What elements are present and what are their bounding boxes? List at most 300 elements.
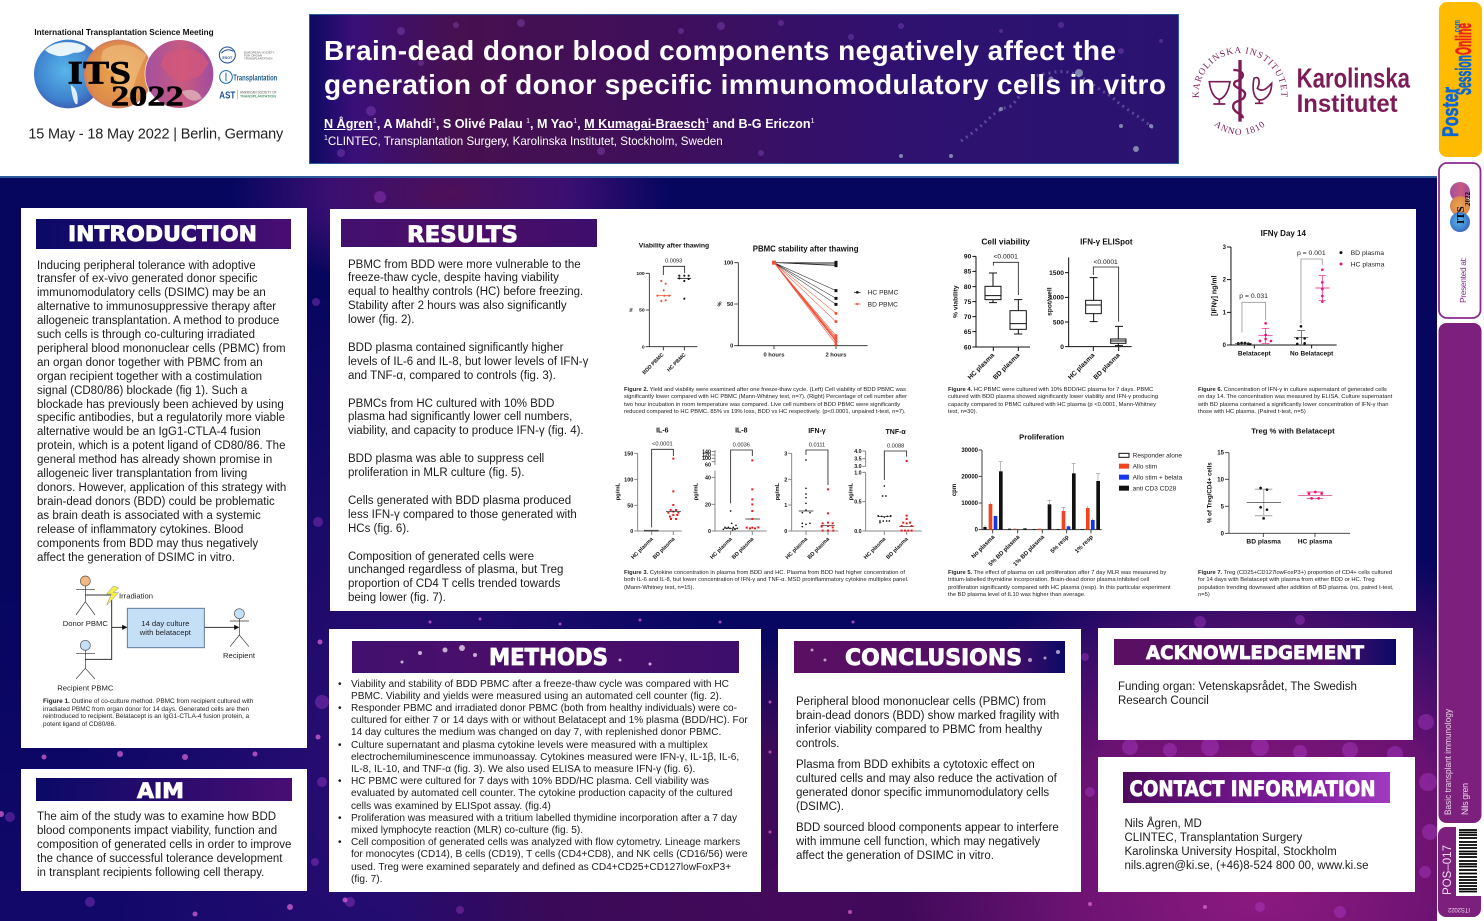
chart: Treg percent with belatacept: 15 xyxy=(1217,451,1225,457)
sidebar: presented at panel: 2022 xyxy=(1464,192,1472,206)
chart: viability after thawing: Viability after thawing xyxy=(639,242,709,249)
chart: Treg percent with belatacept: 10 xyxy=(1217,477,1225,483)
text: results body: PBMC from BDD were more vulnerable to the xyxy=(348,258,581,270)
text: results body: lower (fig. 2). xyxy=(348,314,414,326)
chart: IL-8: HC plasma xyxy=(709,536,734,561)
text: introduction body: general method has already shown promise in xyxy=(37,454,272,466)
diagram: co-culture method: with belatacept xyxy=(139,628,192,637)
chart: IL-8: 100 xyxy=(702,456,711,462)
chart: PBMC stability after thawing: PBMC stability after thawing xyxy=(753,244,859,253)
caption: figure 2: Figure 2. Yield and viability were examined after one freeze-thaw cycle. (Left) Cell viability of BDD PBMC was xyxy=(624,387,906,393)
text: introduction body: brain-dead donors (BDD) could be problematic xyxy=(37,496,275,508)
text: conclusions body: (DSIMC). BDD sourced blood components appear to interfere xyxy=(796,801,1059,834)
text: results body: freeze-thaw cycle, despite having viability xyxy=(348,272,559,284)
chart: IFN-gamma day 14: 1 xyxy=(1223,310,1227,316)
heading: acknowledgement: ACKNOWLEDGEMENT xyxy=(1146,642,1364,664)
caption: figure 3: Figure 3. Cytokine concentration in plasma from BDD and HC. Plasma from BDD had higher concentration of xyxy=(624,570,905,576)
chart: IL-8: 140 xyxy=(702,449,711,455)
caption: figure 2: reduced compared to HC PBMC. 85% vs 19% loss, BDD vs HC respectively. (p<0.0001, unpaired t-test, n=7). xyxy=(624,409,906,415)
text: methods list: • xyxy=(338,813,342,824)
text: conclusions body: generated donor specific immunomodulatory cells xyxy=(796,787,1049,799)
text: acknowledgement body xyxy=(1118,680,1357,707)
sidebar: poster number and barcode: ITS2022 xyxy=(1447,906,1470,912)
text: methods list: evaluated by automated cell counter. The cytokine production capacity of the cultured xyxy=(351,788,732,799)
caption: figure 2: significantly lower compared with HC PBMC (Mann-Whitney test, n=7). (Right) Percentage of cell number after xyxy=(624,394,907,400)
chart: proliferation bars: 30000 xyxy=(961,448,979,454)
caption: figure 2: two hour incubation in room temperature was compared. Live cell numbers of BDD PBMC were significantly xyxy=(624,402,900,408)
caption: figure 6: with BD plasma contained a significantly lower concentration of IFN-γ than xyxy=(1198,402,1388,408)
chart: proliferation bars: 20000 xyxy=(961,474,979,480)
chart: Treg percent with belatacept: 0 xyxy=(1221,531,1225,537)
chart: TNF-alpha: 4.0 xyxy=(854,449,862,455)
text: results body: plasma had significantly lower cell numbers, xyxy=(348,411,572,423)
caption: figure 4: Figure 4. HC PBMC were cultured with 10% BDD/HC plasma for 7 days. PBMC xyxy=(948,387,1153,393)
chart: IFN-gamma plasma: 0.0111 xyxy=(809,443,825,449)
chart: IFN-gamma plasma: 1 xyxy=(784,503,787,509)
text: introduction body: signal (CD80/86) blockade (fig 1). Such a xyxy=(37,385,247,397)
text: introduction body: organ recipient together with a costimulation xyxy=(37,371,262,383)
chart: TNF-alpha: 0.0088 xyxy=(887,444,904,450)
sidebar: poster session online badge: .com xyxy=(1452,20,1462,34)
caption: figure 6: Figure 6. Concentration of IFN-γ in culture supernatant of generated cells xyxy=(1198,387,1387,393)
chart: proliferation bars: 1% resp xyxy=(1074,534,1095,555)
text: methods list: • xyxy=(338,678,342,690)
caption: figure 6: on day 14. The concentration was measured by ELISA. Culture supernatant xyxy=(1198,394,1392,400)
text: results body: BDD plasma was able to suppress cell xyxy=(348,453,544,465)
text: conclusions body: cultured cells and may also reduce the activation of xyxy=(796,773,1057,785)
text: acknowledgement body: Funding organ: Vetenskapsrådet, The Swedish xyxy=(1118,681,1357,693)
text: conclusions body: Peripheral blood mononuclear cells (PBMC) from xyxy=(796,696,1046,708)
text: contact details: CLINTEC, Transplantation Surgery xyxy=(1124,832,1302,844)
text: results body xyxy=(348,258,588,604)
authors: N Ågren1, A Mahdi1, S Olivé Palau 1, M Yao1, M Kumagai-Braesch1 and B-G Ericzon1 xyxy=(324,117,814,131)
chart: TNF-alpha: 0.5 xyxy=(854,500,862,506)
chart: IL-8: 120 xyxy=(702,453,711,459)
chart: proliferation bars: Allo stim xyxy=(1133,464,1157,471)
text: aim body: The aim of the study was to examine how BDD xyxy=(37,811,276,823)
chart: IFN-gamma ELISpot box plot xyxy=(1047,237,1133,381)
caption: figure 5: the BD plasma level of IL10 was higher than average. xyxy=(948,592,1086,598)
text: introduction body: allogeneic transplantation. A method to produce xyxy=(37,315,279,327)
caption: figure 1: potent ligand of CD80/86. xyxy=(43,720,116,728)
chart: TNF-alpha: BD plasma xyxy=(885,536,910,561)
text: methods list: • xyxy=(338,776,342,787)
caption: figure 3 xyxy=(624,570,909,591)
panel: conclusions xyxy=(778,629,1081,892)
chart: cell viability box plot: % viability xyxy=(952,285,959,318)
text: contact details: Karolinska University Hospital, Stockholm xyxy=(1124,846,1337,858)
chart: IL-6: 50 xyxy=(627,503,633,509)
text: introduction body: protein, which is a potent ligand of CD80/86. The xyxy=(37,440,285,452)
chart: cell viability box plot xyxy=(952,236,1030,381)
logo: ITS 2022 meeting: ITS xyxy=(68,55,131,91)
caption: figure 5 xyxy=(948,570,1171,598)
chart: viability after thawing: % xyxy=(629,307,635,312)
panel: acknowledgement xyxy=(1098,628,1413,740)
chart: cell viability box plot: 65 xyxy=(964,329,972,336)
text: aim body: blood components impact viability, function and xyxy=(37,825,277,837)
heading: introduction xyxy=(36,219,291,249)
chart: proliferation bars: Allo stim + belata xyxy=(1133,475,1183,482)
chart: IFN-gamma day 14: IFNγ Day 14 xyxy=(1261,229,1306,238)
chart: IFN-gamma ELISpot box plot: 1000 xyxy=(1049,295,1064,302)
chart: PBMC stability after thawing: 2 hours xyxy=(825,353,847,359)
text: introduction body: an organ donor together with PBMC from an xyxy=(37,357,263,369)
chart: IFN-gamma ELISpot box plot: BD plasma xyxy=(1092,352,1122,381)
caption: figure 5: proliferation significantly compared with HC plasma (resp). In this particular experiment xyxy=(948,585,1171,591)
chart: IFN-gamma day 14: p = 0.031 xyxy=(1239,293,1268,300)
poster title: generation of donor specific immunomodulatory cells in vitro xyxy=(324,69,1166,100)
sidebar: poster session online badge: Poster xyxy=(1438,87,1463,137)
chart: IFN-gamma day 14: p = 0.001 xyxy=(1297,250,1326,257)
chart: IL-6: pg/mL xyxy=(615,482,621,500)
text: results body: equal to healthy controls (HC) before freezing. xyxy=(348,286,583,298)
heading: contact information: CONTACT INFORMATION xyxy=(1130,777,1376,801)
chart: TNF-alpha: TNF-α xyxy=(886,429,906,436)
chart: IL-8: 0 xyxy=(708,529,711,535)
text: methods list xyxy=(338,678,748,885)
caption: figure 7 xyxy=(1198,570,1394,598)
chart: cell viability box plot: BD plasma xyxy=(992,352,1022,381)
chart: proliferation bars: anti CD3 CD28 xyxy=(1133,486,1177,493)
text: introduction body: allogeneic liver transplantation from living xyxy=(37,468,247,480)
heading: methods xyxy=(352,641,739,673)
chart: IL-8: IL-8 xyxy=(735,427,748,434)
poster title xyxy=(324,35,1166,100)
text: results body: unchanged regardless of plasma, but Treg xyxy=(348,564,563,576)
diagram: co-culture method: Donor PBMC xyxy=(63,619,108,628)
chart: IFN-gamma ELISpot box plot: <0.0001 xyxy=(1094,259,1118,266)
logo: ITS 2022 meeting: TRANSPLANTATION xyxy=(240,95,277,99)
chart: TNF-alpha: 1.0 xyxy=(854,470,862,476)
caption: figure 1 xyxy=(43,698,253,728)
heading: aim: AIM xyxy=(137,779,184,803)
text: methods list: Proliferation was measured with a tritium labelled thymidine incorporation after a 7 day xyxy=(351,813,737,824)
chart: Treg percent with belatacept: 5 xyxy=(1221,504,1225,510)
text: introduction body: transfer of ex-vivo generated donor specific xyxy=(37,273,258,285)
panel: methods xyxy=(329,629,761,892)
sidebar: poster number and barcode: POS–017 xyxy=(1440,845,1454,895)
text: methods list: 14 day cultures the medium was changed on day 7, with replenished donor PBMC. xyxy=(351,727,721,738)
chart: proliferation bars: 5% resp xyxy=(1050,534,1071,555)
text: contact details xyxy=(1124,816,1369,872)
chart: PBMC stability after thawing: BD PBMC xyxy=(868,301,898,308)
text: introduction body: peripheral blood mononuclear cells (PBMC) from xyxy=(37,343,286,355)
text: contact details: nils.agren@ki.se, (+46)8-524 800 00, www.ki.se xyxy=(1124,860,1369,872)
chart: viability after thawing: 0 xyxy=(642,344,645,350)
chart: IL-6: 150 xyxy=(624,451,633,457)
text: methods list: HC PBMC were cultured for 7 days with 10% BDD/HC plasma. Cell viability was xyxy=(351,776,709,787)
chart: IFN-gamma plasma: pg/mL xyxy=(775,482,781,500)
title banner xyxy=(309,14,1179,164)
text: conclusions body xyxy=(796,696,1059,862)
text: methods list: Cell composition of generated cells was analyzed with flow cytometry. Lineage markers xyxy=(351,837,740,848)
chart: IL-6: IL-6 xyxy=(656,427,669,434)
text: introduction body: donors. However, application of this strategy with xyxy=(37,482,286,494)
chart: IFN-gamma plasma: 0 xyxy=(784,529,787,535)
logo: Karolinska Institutet: Karolinska xyxy=(1297,62,1411,93)
text: conclusions body: with immune cell function, which may negatively xyxy=(796,836,1040,848)
text: introduction body: as brain death is associated with a systemic xyxy=(37,510,261,522)
text: aim body xyxy=(37,811,291,879)
diagram: co-culture method xyxy=(57,576,256,692)
chart: Treg percent with belatacept: Treg % with Belatacept xyxy=(1251,426,1335,435)
chart: cell viability box plot: 60 xyxy=(964,344,972,351)
text: methods list: IL-8, IL-10, and TNF-α (fig. 3). We also used ELISA to measure IFN-γ (fig. 6). xyxy=(351,764,695,775)
caption: figure 4: cultured with BDD plasma showed significantly lower viability and IFN-γ producing xyxy=(948,394,1158,400)
chart: IL-8: BD plasma xyxy=(731,536,756,561)
chart: TNF-alpha: 3.0 xyxy=(854,464,862,470)
sidebar: poster session online badge: Session xyxy=(1451,55,1476,95)
chart: PBMC stability after thawing: 0 hours xyxy=(763,353,785,359)
logo: ITS 2022 meeting: ESOT xyxy=(222,56,233,60)
text: methods list: mixed lymphocyte reaction (MLR) co-culture (fig. 5). xyxy=(351,825,583,836)
text: aim body: the chance of successful tolerance development xyxy=(37,853,282,865)
text: methods list: cells was examined by ELISpot assay. (fig.4) xyxy=(351,801,551,812)
caption: figure 1: irradiated PBMC from organ donor for 14 days. Generated cells are then xyxy=(43,706,249,712)
chart: IL-6: HC plasma xyxy=(630,536,655,561)
caption: figure 5: Figure 5. The effect of plasma on cell proliferation after 7 day MLR was measured by xyxy=(948,570,1166,576)
text: methods list: PBMC. Viability and yields were measured using an automated cell counter (fig. 2). xyxy=(351,691,722,702)
chart: IFN-gamma plasma: BD plasma xyxy=(807,536,832,561)
text: introduction body: release of inflammatory cytokines. Blood xyxy=(37,524,243,536)
text: results body: and TNF-α, compared to controls (fig. 3). xyxy=(348,370,556,382)
text: results body: PBMCs from HC cultured with 10% BDD xyxy=(348,398,554,410)
caption: figure 2 xyxy=(624,387,907,415)
chart: cell viability box plot: 75 xyxy=(964,299,972,306)
text: results body: HCs (fig. 6). xyxy=(348,523,409,535)
text: results body: viability, and capacity to produce IFN-γ (fig. 4). xyxy=(348,425,584,437)
text: introduction body: such cells is through co-culturing irradiated xyxy=(37,329,255,341)
chart: IFN-gamma plasma: HC plasma xyxy=(785,536,810,561)
chart: proliferation bars: 0 xyxy=(975,528,979,534)
caption: figure 1: Figure 1. Outline of co-culture method. PBMC from recipient cultured with xyxy=(43,698,253,705)
text: methods list: Culture supernatant and plasma cytokine levels were measured with a multiplex xyxy=(351,740,708,751)
chart: Treg percent with belatacept: HC plasma xyxy=(1298,539,1332,546)
caption: figure 4: test, n=30). xyxy=(948,409,977,415)
chart: TNF-alpha: pg/mL xyxy=(848,482,854,500)
chart: IFN-gamma day 14: BD plasma xyxy=(1351,250,1384,257)
chart: IFN-gamma plasma: IFN-γ xyxy=(808,428,826,435)
chart: PBMC stability after thawing: HC PBMC xyxy=(868,290,899,297)
chart: cell viability box plot: 70 xyxy=(964,314,972,321)
chart: TNF-alpha: 3.5 xyxy=(854,457,862,463)
logo: ITS 2022 meeting xyxy=(28,27,284,142)
text: methods list: cultured for either 7 or 14 days with or without Belatacept and 1% plasma (BDD/HC). For xyxy=(351,715,748,726)
chart: IL-6: 0 xyxy=(630,529,633,535)
text: methods list: Responder PBMC and irradiated donor PBMC (both from healthy individuals) were co- xyxy=(351,703,737,714)
text: introduction body: alternative to immunosuppressive therapy after xyxy=(37,301,276,313)
caption: figure 6: those with HC plasma. (Paired t-test, n=5) xyxy=(1198,409,1306,415)
logo: Karolinska Institutet: KAROLINSKA INSTITUTET xyxy=(1192,46,1288,98)
chart: IFN-gamma ELISpot box plot: 0 xyxy=(1060,344,1064,351)
text: introduction body: affect the generation of DSIMC in vitro. xyxy=(37,552,235,564)
chart: viability after thawing: 0.0093 xyxy=(665,259,682,265)
text: methods list: (fig. 7). xyxy=(351,874,382,885)
caption: figure 4: capacity compared to PBMC cultured with HC plasma (p <0.0001, Mann-Whitney xyxy=(948,402,1156,408)
heading: conclusions xyxy=(794,641,1065,673)
text: results body: less IFN-γ compared to those generated with xyxy=(348,509,577,521)
sidebar: session and author panel: Basic transplant immunology xyxy=(1443,708,1453,815)
caption: figure 1: reintroduced to recipient. Belatacept is an IgG1-CTLA-4 fusion protein, a xyxy=(43,713,249,720)
heading: results: RESULTS xyxy=(407,223,518,248)
text: results body: proliferation in MLR culture (fig. 5). xyxy=(348,467,524,479)
text: introduction body: immunomodulatory cells (DSIMC) may be an xyxy=(37,287,266,299)
chart: TNF-alpha xyxy=(848,429,922,561)
text: results body: levels of IL-6 and IL-8, but lower levels of IFN-γ xyxy=(348,356,588,368)
sidebar: session and author panel xyxy=(1438,323,1482,823)
affiliation: 1CLINTEC, Transplantation Surgery, Karolinska Institutet, Stockholm, Sweden xyxy=(324,135,723,148)
chart: proliferation bars: 5% BD plasma xyxy=(988,534,1022,568)
chart: IFN-gamma day 14: No Belatacept xyxy=(1290,350,1334,357)
text: conclusions body: affect the generation of DSIMC in vitro. xyxy=(796,850,994,862)
chart: cell viability box plot: 90 xyxy=(964,254,972,261)
sidebar: poster session online badge xyxy=(1438,2,1482,157)
text: methods list: electrochemiluminescence immunoassay. Cytokines measured were IFN-γ, IL-1β, IL-6, xyxy=(351,752,739,763)
chart: IFN-gamma ELISpot box plot: 500 xyxy=(1053,319,1064,326)
chart: IFN-gamma day 14 xyxy=(1212,229,1385,357)
chart: viability after thawing: HC PBMC xyxy=(666,352,688,373)
sidebar: presented at panel: ITS xyxy=(1455,206,1467,224)
text: results body: Composition of generated cells were xyxy=(348,551,534,563)
logo: ITS 2022 meeting: Transplantation xyxy=(233,73,277,83)
logo: ITS 2022 meeting: TRANSPLANTATION xyxy=(244,56,272,60)
panel: aim xyxy=(21,769,307,891)
poster title: Brain-dead donor blood components negatively affect the xyxy=(324,35,1116,66)
caption: figure 7: for 14 days with Belatacept with plasma from either BDD or HC. Treg xyxy=(1198,577,1375,583)
chart: viability after thawing xyxy=(629,242,709,376)
chart: cell viability box plot: Cell viability xyxy=(981,236,1030,246)
chart: cell viability box plot: <0.0001 xyxy=(994,253,1018,260)
panel: introduction xyxy=(21,208,307,748)
heading: aim xyxy=(36,778,292,803)
chart: proliferation bars: No plasma xyxy=(971,534,997,560)
chart: cell viability box plot: HC plasma xyxy=(967,352,996,381)
sidebar: session and author panel: Nils gren xyxy=(1460,783,1470,815)
text: introduction body: Inducing peripheral tolerance with adoptive xyxy=(37,260,256,272)
logo: ITS 2022 meeting: AMERICAN SOCIETY OF xyxy=(240,91,277,95)
text: methods list: used. Treg were examined separately and defined as CD4+CD25+CD127lowFoxP3+ xyxy=(351,862,731,873)
text: introduction body: alternative would be an IgG1-CTLA-4 fusion xyxy=(37,426,261,438)
heading: methods: METHODS xyxy=(489,645,608,671)
chart: IL-6 xyxy=(615,427,682,561)
logo: ITS 2022 meeting: 15 May - 18 May 2022 | Berlin, Germany xyxy=(28,126,284,142)
text: methods list: • xyxy=(338,740,342,750)
chart: IL-8: 60 xyxy=(705,462,711,468)
text: acknowledgement body: Research Council xyxy=(1118,695,1209,707)
text: introduction body: blockade has previously been achieved by using xyxy=(37,399,284,411)
chart: IFN-gamma plasma: 2 xyxy=(784,477,787,483)
text: introduction body: components from BDD may thus negatively xyxy=(37,538,258,550)
sidebar: presented at panel: Presented at: xyxy=(1458,257,1468,303)
chart: Treg percent with belatacept: % of Treg/CD4+ cells xyxy=(1206,462,1213,523)
sidebar: presented at panel xyxy=(1438,162,1482,319)
chart: IFN-gamma plasma xyxy=(775,428,838,561)
text: methods list: • xyxy=(338,837,342,848)
text: introduction body xyxy=(37,260,286,564)
chart: Treg percent with belatacept: BD plasma xyxy=(1246,539,1281,546)
diagram: co-culture method: Recipient PBMC xyxy=(57,683,114,692)
panel: contact information xyxy=(1098,757,1415,892)
chart: IFN-gamma day 14: Belatacept xyxy=(1238,350,1272,357)
text: methods list: Viability and stability of BDD PBMC after a freeze-thaw cycle was compared with HC xyxy=(351,678,729,690)
caption: figure 7: n=5) xyxy=(1198,592,1210,598)
logo: Karolinska Institutet: Institutet xyxy=(1297,91,1398,118)
chart: IFN-gamma day 14: HC plasma xyxy=(1351,261,1385,268)
caption: figure 5: tritium-labelled thymidine incorporation. Brain-dead donor plasma inhibited cell xyxy=(948,577,1149,583)
logo: ITS 2022 meeting: International Transplantation Science Meeting xyxy=(34,27,214,37)
logo: ITS 2022 meeting: AST xyxy=(219,90,236,101)
poster background xyxy=(0,176,1437,921)
chart: IL-8 xyxy=(694,427,767,561)
logo: Karolinska Institutet xyxy=(1192,46,1411,135)
panel: results xyxy=(330,209,1416,611)
diagram: co-culture method: 14 day culture xyxy=(141,619,189,628)
caption: figure 3: (Mann-Whitney test, n=15). xyxy=(624,585,694,591)
logo: Karolinska Institutet: ANNO 1810 xyxy=(1214,122,1264,135)
chart: IL-8: 20 xyxy=(705,502,711,508)
chart: IFN-gamma day 14: 2 xyxy=(1223,278,1227,284)
text: aim body: in transplant recipients following cell therapy. xyxy=(37,867,264,879)
text: conclusions body: inferior viability compared to PBMC from healthy xyxy=(796,724,1042,736)
diagram: co-culture method: Irradiation xyxy=(119,591,153,600)
chart: PBMC stability after thawing xyxy=(718,244,899,359)
text: results body: Cells generated with BDD plasma produced xyxy=(348,495,571,507)
logo: ITS 2022 meeting: EUROPEAN SOCIETY xyxy=(244,50,275,54)
chart: IL-6: BD plasma xyxy=(652,536,677,561)
chart: PBMC stability after thawing: 0 xyxy=(730,344,733,350)
chart: cell viability box plot: 85 xyxy=(964,269,972,276)
diagram: co-culture method: Recipient xyxy=(223,651,256,660)
text: results body: being lower (fig. 7). xyxy=(348,592,446,604)
text: introduction body: specific antibodies, but a regulatorily more viable xyxy=(37,412,285,424)
text: results body: Stability after 2 hours was also significantly xyxy=(348,300,567,312)
text: methods list: for monocytes (CD14), B cells (CD19), T cells (CD4+CD8), and NK cells (CD16/56) were xyxy=(351,849,748,860)
chart: cell viability box plot: 80 xyxy=(964,284,972,291)
chart: IFN-gamma ELISpot box plot: IFN-γ ELISpot xyxy=(1080,237,1133,246)
chart: PBMC stability after thawing: 50 xyxy=(727,302,733,308)
text: aim body: composition of generated cells in order to improve xyxy=(37,839,291,851)
chart: IFN-gamma ELISpot box plot: 1500 xyxy=(1049,270,1064,277)
heading: results xyxy=(341,219,597,248)
caption: figure 7: population trending downward after addition of BD plasma. (ns, paired t-test, xyxy=(1198,585,1394,591)
text: methods list: • xyxy=(338,703,342,714)
chart: IFN-gamma day 14: [IFNγ] ng/ml xyxy=(1212,275,1219,316)
text: results body: BDD plasma contained significantly higher xyxy=(348,342,563,354)
text: results body: proportion of CD4 T cells trended towards xyxy=(348,578,560,590)
chart: proliferation bars: Responder alone xyxy=(1133,453,1182,460)
chart: IL-6: <0.0001 xyxy=(652,442,673,448)
chart: proliferation bars: cpm xyxy=(952,484,958,496)
chart: IL-6: 100 xyxy=(624,477,633,483)
caption: figure 6 xyxy=(1198,387,1392,415)
text: contact details: Nils Ågren, MD xyxy=(1124,818,1202,830)
chart: PBMC stability after thawing: 100 xyxy=(724,261,733,267)
chart: proliferation bars: Proliferation xyxy=(1019,433,1065,442)
chart: viability after thawing: 50 xyxy=(639,308,645,314)
sidebar: poster number and barcode xyxy=(1438,827,1481,917)
caption: figure 7: Figure 7. Treg (CD25+CD127lowFoxP3+) proportion of CD4+ cells cultured xyxy=(1198,570,1392,576)
caption: figure 4 xyxy=(948,387,1158,415)
chart: IL-8: pg/mL xyxy=(694,482,700,500)
chart: IFN-gamma ELISpot box plot: HC plasma xyxy=(1067,352,1097,381)
chart: PBMC stability after thawing: % xyxy=(718,301,724,307)
chart: Treg percent with belatacept xyxy=(1206,426,1350,546)
chart: TNF-alpha: HC plasma xyxy=(863,536,888,561)
logo: ITS 2022 meeting: 2022 xyxy=(111,81,184,112)
chart: IFN-gamma day 14: 3 xyxy=(1223,245,1227,251)
chart: viability after thawing: BDD PBMC xyxy=(642,352,666,376)
